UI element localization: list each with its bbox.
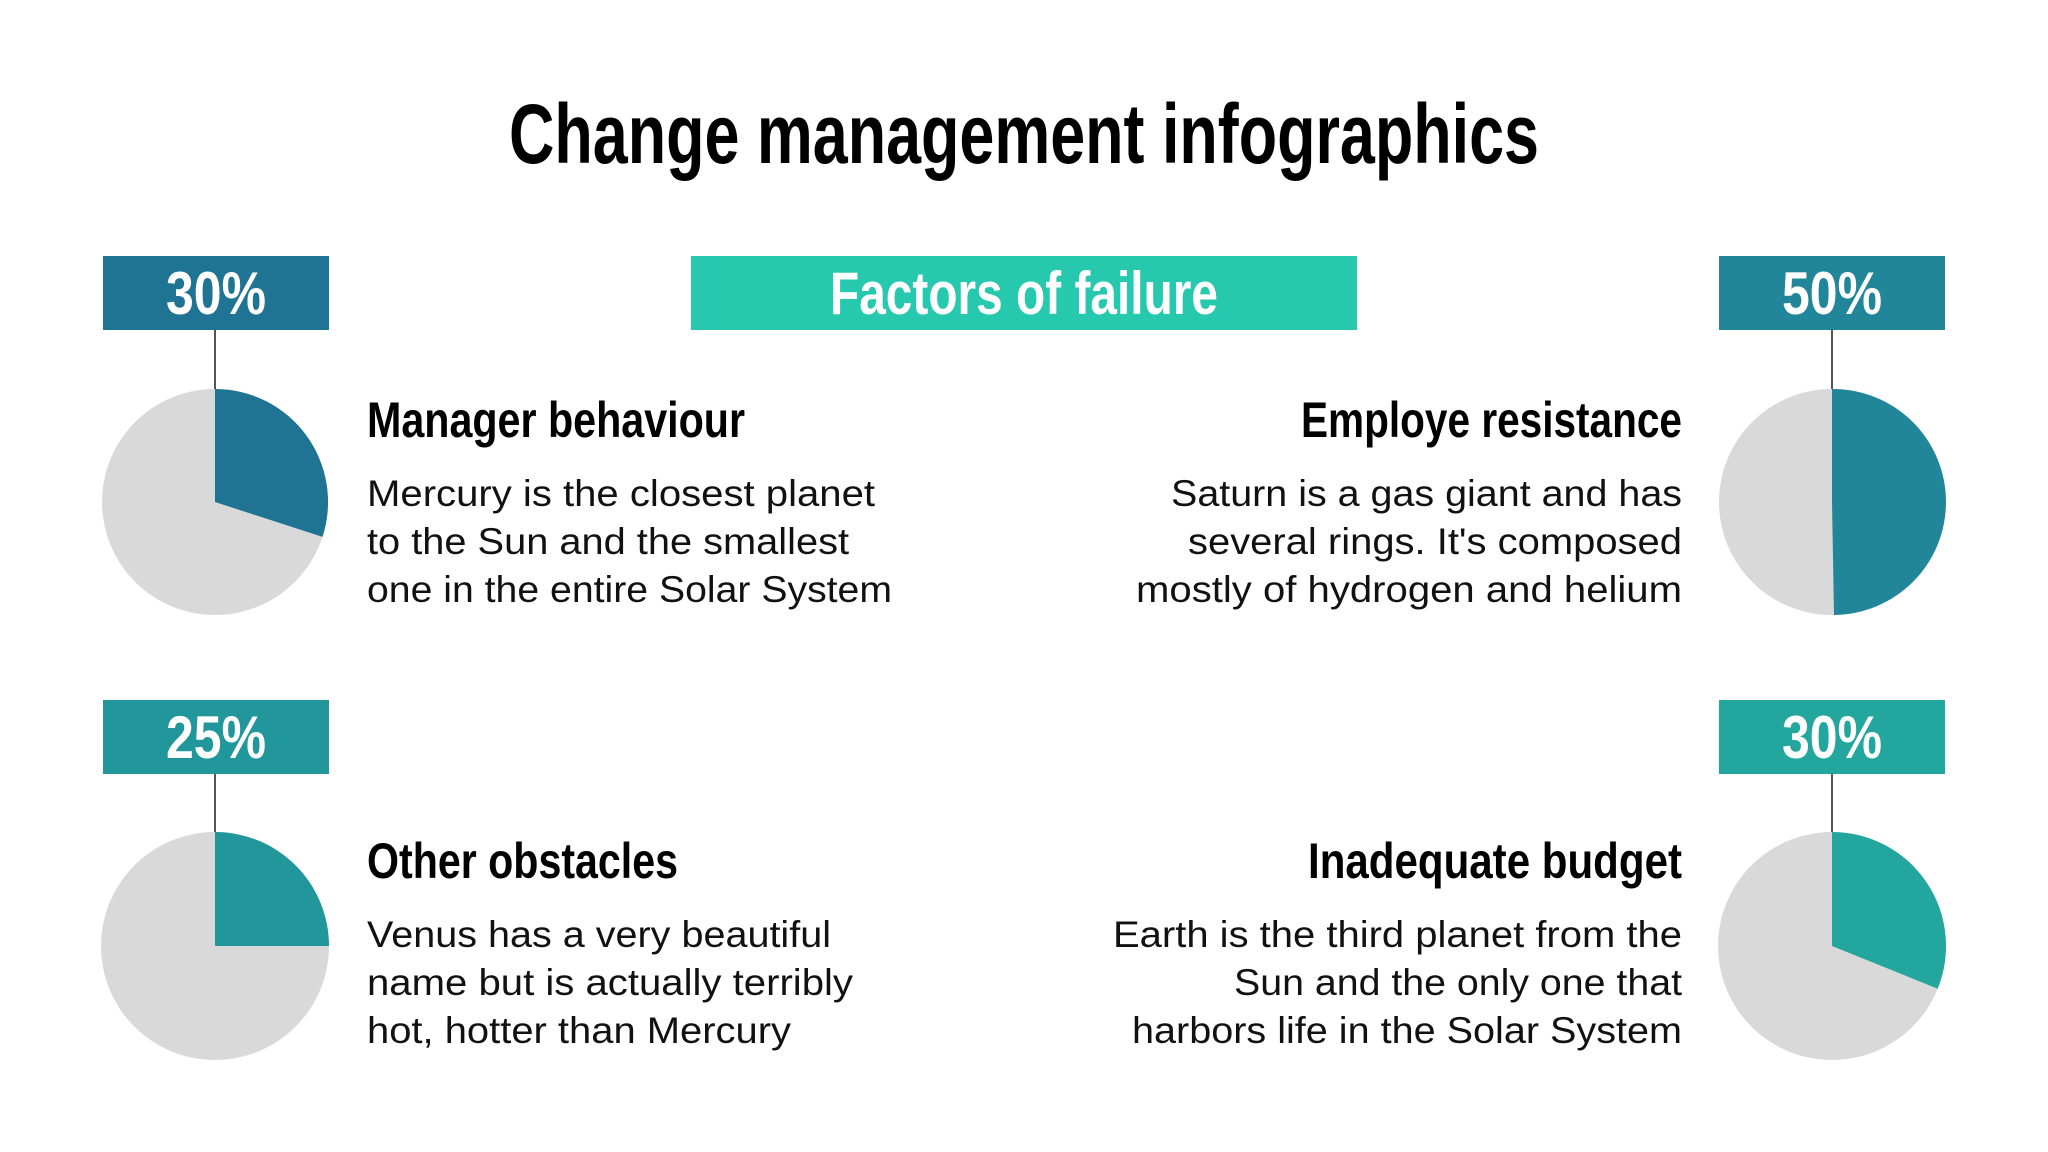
body text: Venus has a very beautiful <box>367 914 831 955</box>
body text: mostly of hydrogen and helium <box>1136 569 1682 610</box>
body text: hot, hotter than Mercury <box>367 1010 792 1051</box>
heading: Other obstacles <box>367 833 678 889</box>
percentage badge 25%: 25% <box>166 704 266 771</box>
body text <box>1113 914 1683 1051</box>
percentage badge 30% <box>103 256 329 330</box>
body text: Mercury is the closest planet <box>367 473 876 514</box>
percentage badge 50%: 50% <box>1782 260 1882 327</box>
percentage badge 30%: 30% <box>166 260 266 327</box>
body text: name but is actually terribly <box>367 962 854 1003</box>
percentage badge 25% <box>103 700 329 774</box>
body text: to the Sun and the smallest <box>367 521 850 562</box>
pie chart 30% <box>1718 832 1946 1060</box>
pie chart 50% <box>1719 389 1946 615</box>
body text: several rings. It's composed <box>1188 521 1682 562</box>
heading: Manager behaviour <box>367 392 745 448</box>
body text: one in the entire Solar System <box>367 569 892 610</box>
body text: Saturn is a gas giant and has <box>1171 473 1682 514</box>
body text <box>367 473 892 610</box>
pie chart 30% <box>102 389 328 615</box>
body text: Earth is the third planet from the <box>1113 914 1682 955</box>
body text: Sun and the only one that <box>1234 962 1683 1003</box>
banner: Factors of failure <box>691 256 1357 330</box>
banner: Factors of failure: Factors of failure <box>830 260 1218 327</box>
panel: employe resistance <box>1136 256 1946 615</box>
percentage badge 50% <box>1719 256 1945 330</box>
body text <box>367 914 854 1051</box>
body text: harbors life in the Solar System <box>1132 1010 1682 1051</box>
panel: inadequate budget <box>1113 700 1946 1060</box>
percentage badge 30% <box>1719 700 1945 774</box>
pie chart 25% <box>101 832 329 1060</box>
body text <box>1136 473 1682 610</box>
panel: manager behaviour <box>102 256 892 615</box>
panel: other obstacles <box>101 700 854 1060</box>
title: Change management infographics <box>509 87 1539 181</box>
heading: Inadequate budget <box>1308 833 1682 889</box>
percentage badge 30%: 30% <box>1782 704 1882 771</box>
heading: Employe resistance <box>1301 392 1682 448</box>
